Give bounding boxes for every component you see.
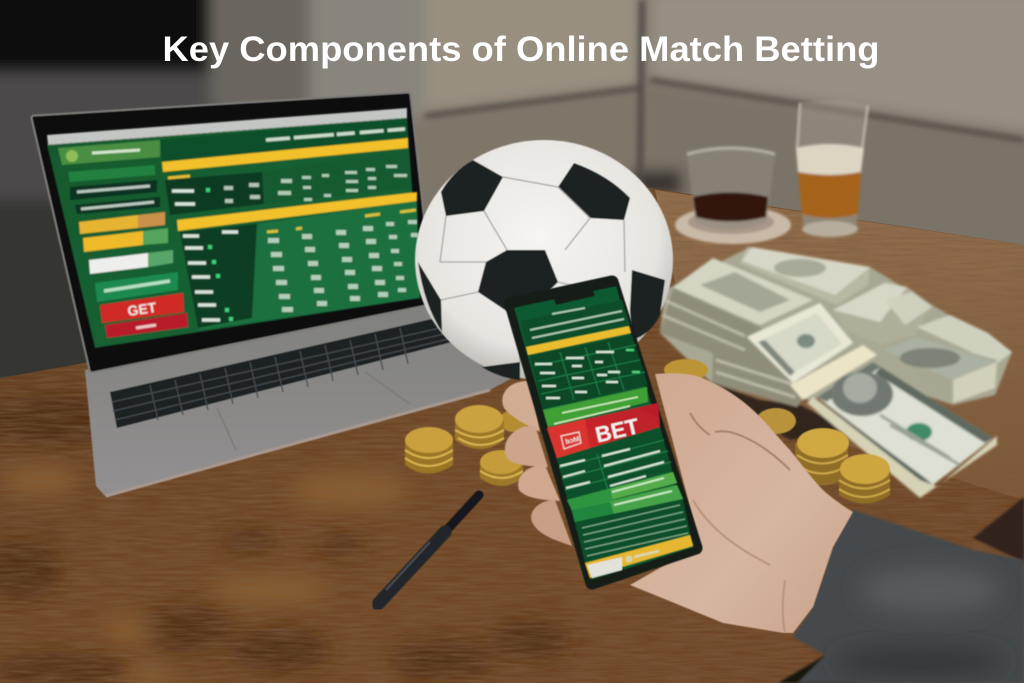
glass of tea on saucer xyxy=(675,148,791,244)
stack: banded bill xyxy=(747,303,877,400)
phone details rows xyxy=(557,427,672,499)
soccer ball xyxy=(415,140,673,380)
button: GET: GET xyxy=(126,299,158,319)
phone bet button xyxy=(547,403,660,458)
stack: backing mass xyxy=(660,247,1012,405)
phone screen xyxy=(516,288,692,578)
phone yellow footer xyxy=(585,535,693,578)
coin stack: right xyxy=(756,408,849,486)
sleeve xyxy=(793,510,1024,683)
glass of beer xyxy=(796,100,868,237)
stack: top xyxy=(740,247,870,305)
hand: finger 1 xyxy=(502,381,540,432)
hand: finger 3 xyxy=(518,465,560,501)
laptop xyxy=(34,95,512,497)
hand: finger 2 xyxy=(505,425,548,467)
phone body xyxy=(511,282,696,583)
hand xyxy=(502,373,853,633)
phone odds table xyxy=(530,335,648,409)
coin: behind hand xyxy=(664,359,708,381)
laptop base xyxy=(85,300,512,497)
phone bet button: bɔM xyxy=(565,436,580,446)
hand: palm and thumb xyxy=(630,373,853,633)
table top xyxy=(0,188,1024,683)
coins xyxy=(405,359,890,504)
laptop lid xyxy=(34,95,431,370)
hand: finger 4 xyxy=(531,500,572,546)
coin stack: front xyxy=(480,450,523,486)
coin stack: far left xyxy=(405,427,453,474)
shadow: under money xyxy=(690,375,850,440)
phone light green rows xyxy=(567,472,683,522)
stack: upper left xyxy=(660,258,813,407)
laptop screen xyxy=(47,108,420,348)
sidebar xyxy=(58,140,188,338)
phone xyxy=(511,282,696,583)
pen xyxy=(378,495,479,604)
phone footer text xyxy=(575,499,690,563)
title: Key Components of Online Match Betting xyxy=(162,30,880,69)
background: sofa xyxy=(0,0,1024,400)
browser bar xyxy=(47,108,407,145)
coin stack: right front xyxy=(839,454,890,504)
phone green banner xyxy=(543,387,648,427)
bet label: BET xyxy=(593,413,642,448)
phone header xyxy=(520,300,631,355)
money stacks xyxy=(660,247,1012,498)
odds tables xyxy=(162,138,420,330)
stack: right middle xyxy=(833,283,932,345)
coin stack: middle xyxy=(455,405,529,449)
stack: far right xyxy=(883,315,1012,405)
ball panels xyxy=(418,160,665,380)
stack: main bill xyxy=(807,362,997,498)
